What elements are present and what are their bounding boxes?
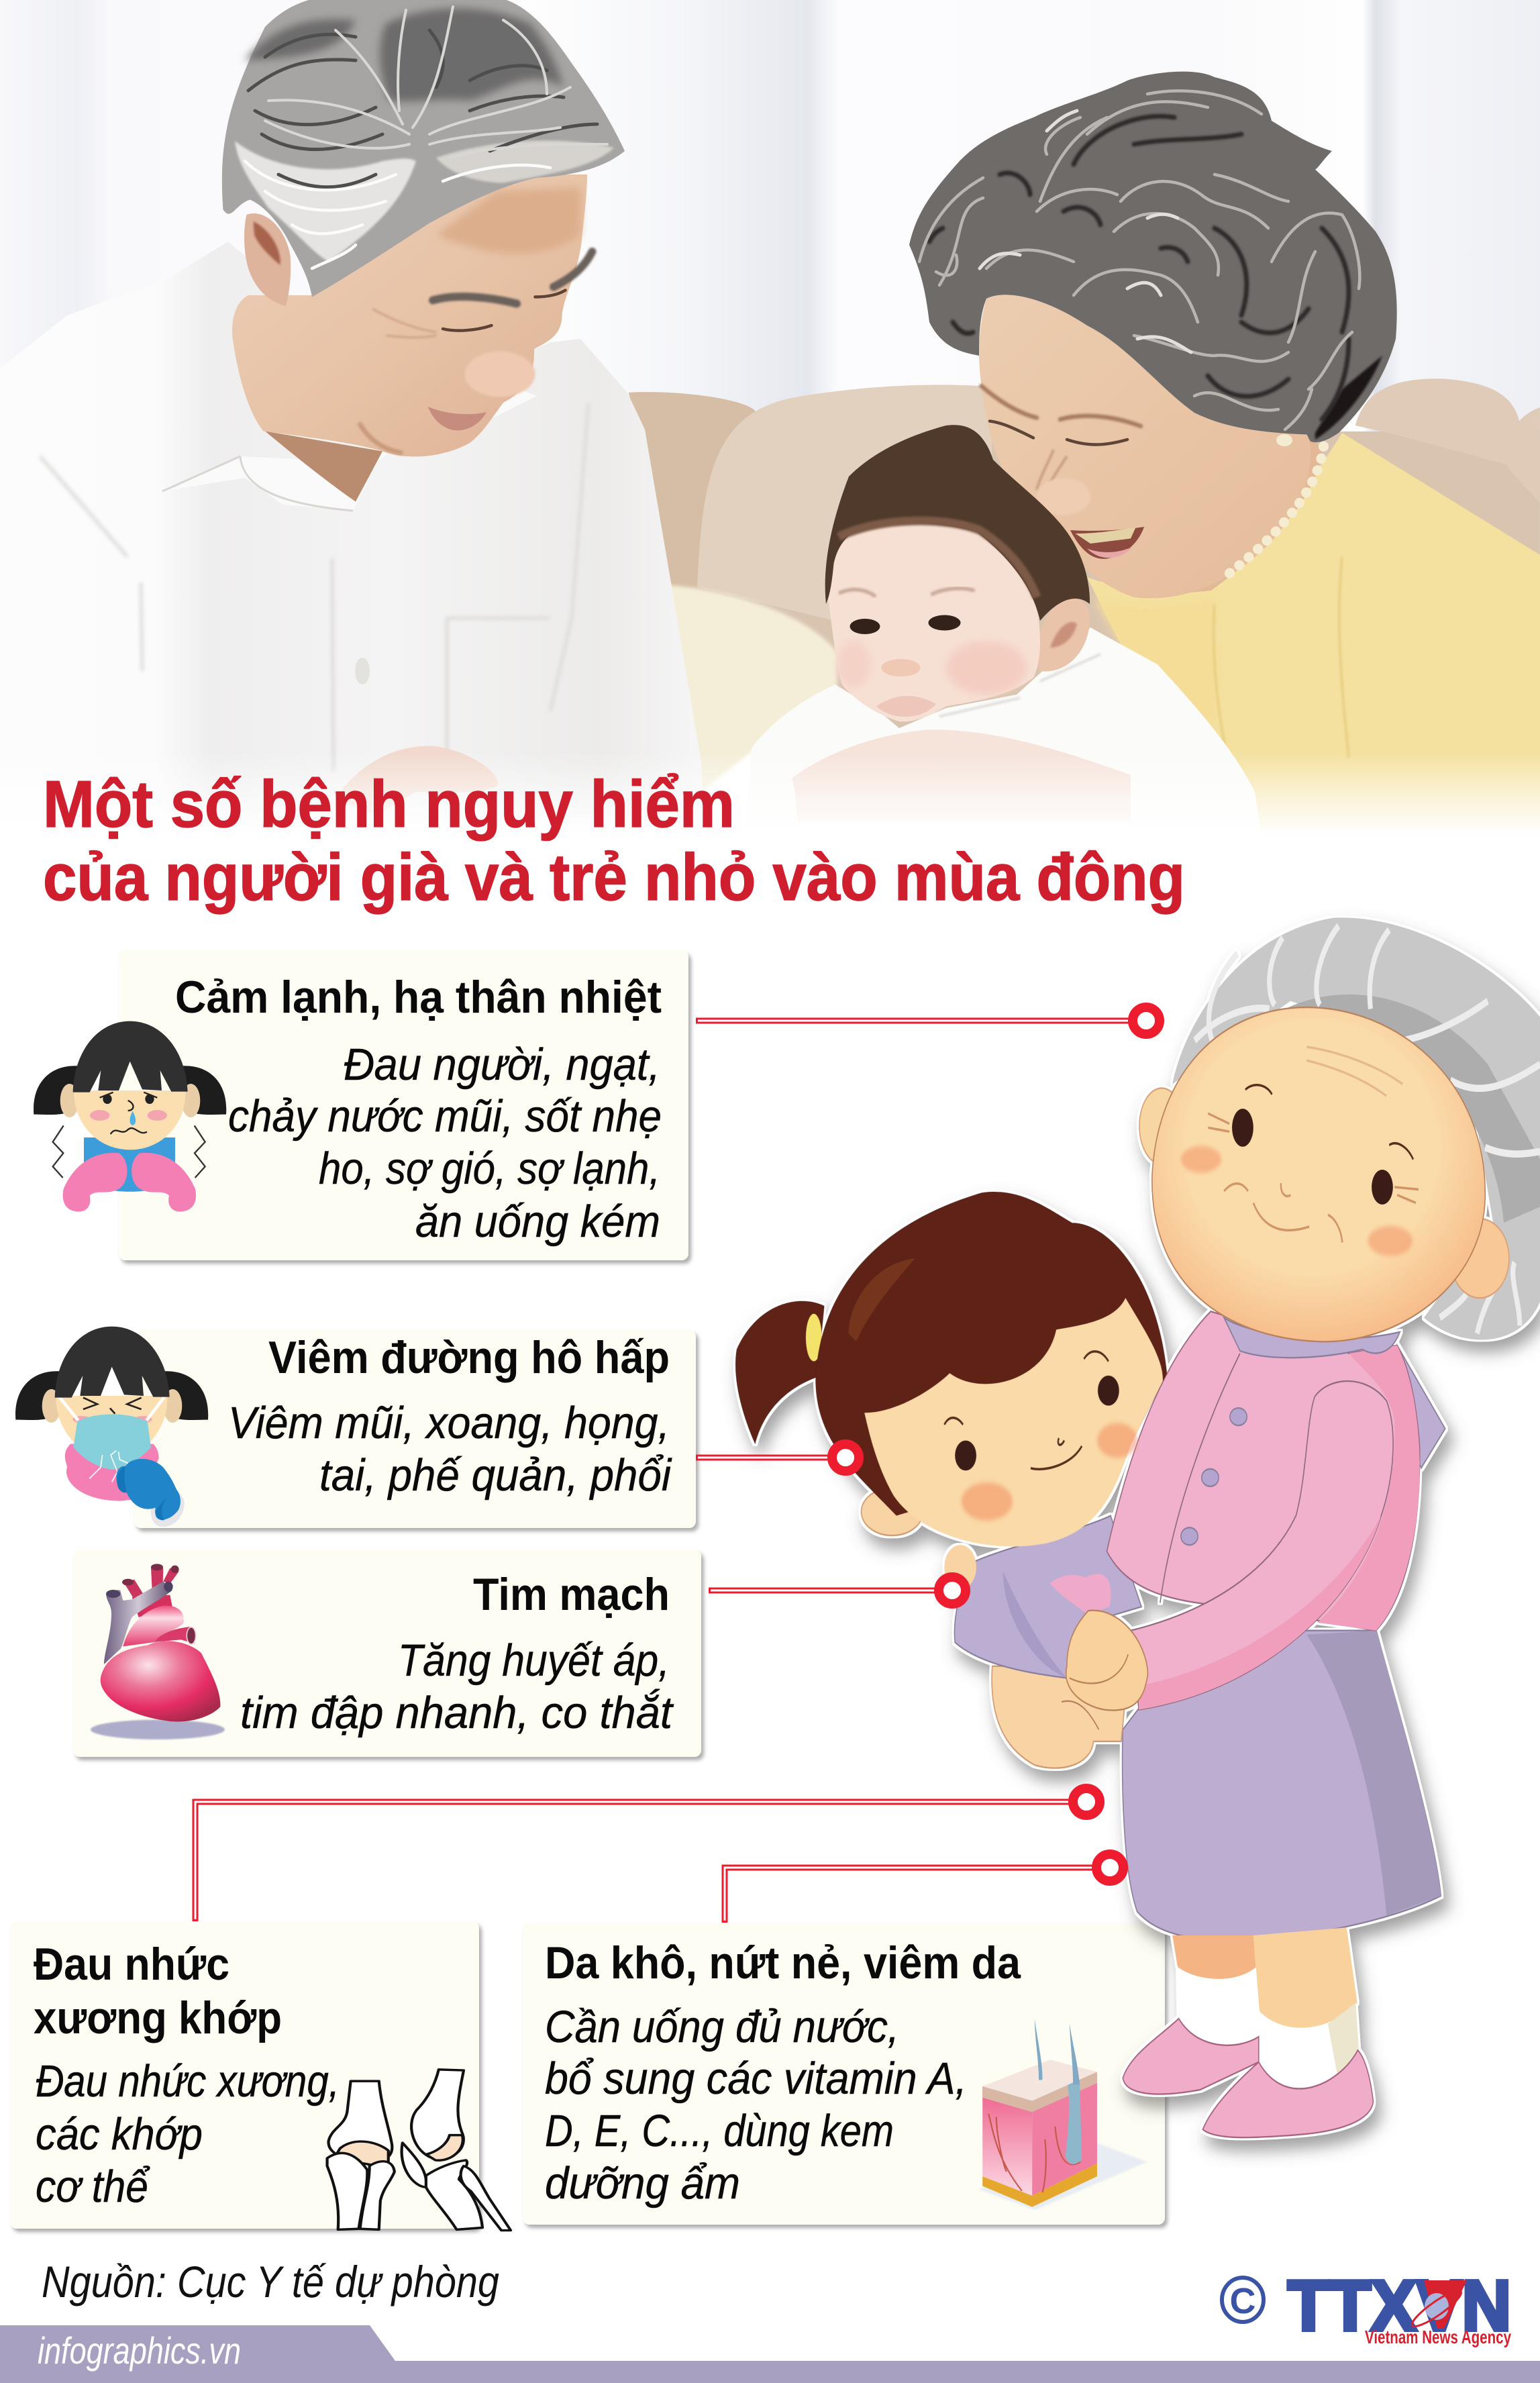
woman: head bbox=[909, 72, 1397, 599]
curtain background bbox=[0, 0, 1540, 510]
grandmother: hair net and bun bbox=[1172, 917, 1540, 1339]
footer band: infographics.vn bbox=[38, 2329, 241, 2372]
panel: dry skin: Da khô, nứt nẻ, viêm da bbox=[545, 1937, 1021, 1988]
panel: dry skin: Cần uống đủ nước, bbox=[545, 2002, 899, 2052]
girl: ear bbox=[861, 1488, 923, 1535]
baby: ear bbox=[1037, 598, 1090, 671]
title: của người già và trẻ nhỏ vào mùa đông bbox=[43, 840, 1185, 914]
panel: joint pain: cơ thể bbox=[36, 2162, 150, 2212]
panel: cold and hypothermia: ăn uống kém bbox=[415, 1197, 660, 1247]
man: grey hair bbox=[222, 0, 625, 297]
title: Một số bệnh nguy hiểm bbox=[43, 767, 735, 841]
panel: respiratory infection bbox=[134, 1330, 696, 1528]
panel: joint pain: Đau nhức bbox=[34, 1939, 229, 1990]
title bbox=[43, 767, 1185, 914]
pillow bbox=[668, 585, 839, 792]
woman: eyes, brows, nose bbox=[981, 386, 1141, 426]
connector: respiratory to girl bbox=[696, 1444, 859, 1471]
man: head bbox=[222, 0, 625, 502]
scarf bbox=[84, 1137, 175, 1192]
source note: Nguồn: Cục Y tế dự phòng bbox=[42, 2257, 499, 2306]
panel: joint pain bbox=[10, 1921, 479, 2229]
grandmother: collar bbox=[1224, 1318, 1400, 1358]
panel: cardiovascular bbox=[73, 1550, 701, 1757]
grandmother: ears bbox=[1139, 1088, 1184, 1164]
panel: dry skin: bổ sung các vitamin A, bbox=[545, 2054, 967, 2104]
man: hand bbox=[336, 746, 498, 815]
panel: cold and hypothermia: Cảm lạnh, hạ thân nhiệt bbox=[175, 972, 662, 1023]
pearl necklace bbox=[1225, 446, 1323, 577]
grandmother: shoes bbox=[1123, 2019, 1259, 2094]
grandmother: buttons bbox=[1181, 1408, 1247, 1545]
woman: hand on baby bbox=[792, 729, 1131, 822]
mittens bbox=[63, 1153, 127, 1211]
sofa bbox=[629, 378, 1540, 731]
girl: face details bbox=[955, 1440, 976, 1470]
woman: face bbox=[979, 295, 1311, 599]
grandmother: arm bbox=[1131, 1381, 1393, 1710]
panel: joint pain: Đau nhức xương, bbox=[36, 2056, 340, 2107]
panel: dry skin: D, E, C..., dùng kem bbox=[545, 2106, 894, 2156]
woman: curly grey hair bbox=[909, 72, 1397, 442]
grandmother: head bbox=[1152, 1007, 1485, 1341]
man: eyebrows and eyes bbox=[433, 252, 592, 303]
connector: heart to girl bbox=[709, 1577, 966, 1604]
girl: face bbox=[864, 1298, 1163, 1547]
icon: girl with mask coughing bbox=[15, 1327, 208, 1527]
woman: neck bbox=[1141, 433, 1322, 597]
grandmother: legs and socks bbox=[1172, 1935, 1259, 1980]
girl: pigtail and hair tie bbox=[735, 1301, 825, 1444]
connector: cold to grandmother's head bbox=[696, 1007, 1160, 1034]
woman: mouth bbox=[1070, 527, 1144, 559]
illustration: grandmother hugging a girl bbox=[735, 917, 1540, 2137]
upper heart bbox=[123, 1606, 184, 1646]
footer band bbox=[0, 2325, 1540, 2383]
panel: cold and hypothermia bbox=[119, 950, 688, 1260]
woman: earring bbox=[1276, 434, 1292, 446]
vessels bbox=[125, 1568, 179, 1599]
mask bbox=[73, 1414, 151, 1470]
man: ear bbox=[244, 213, 291, 306]
icon: knee joints bbox=[327, 2070, 511, 2231]
grandmother: face details bbox=[1208, 1047, 1419, 1243]
baby: clothes and woman's cardigan bbox=[745, 433, 1540, 839]
mitten bbox=[151, 1485, 185, 1527]
panel: cold and hypothermia: chảy nước mũi, sốt nhẹ bbox=[228, 1091, 662, 1142]
panel: cardiovascular: tim đập nhanh, co thắt bbox=[240, 1688, 674, 1738]
icon: heart bbox=[91, 1564, 225, 1739]
man: collar bbox=[162, 376, 537, 511]
logo: TTXVN: TTXVN bbox=[1288, 2266, 1511, 2345]
baby: brows, eyes, nose, mouth bbox=[839, 589, 974, 597]
girl: shirt bbox=[954, 1516, 1141, 1678]
baby: head bbox=[825, 425, 1090, 721]
panel: respiratory infection: tai, phế quản, phổi bbox=[319, 1450, 672, 1501]
panel: cold and hypothermia: Đau người, ngạt, bbox=[344, 1040, 660, 1090]
panel: cardiovascular: Tăng huyết áp, bbox=[398, 1635, 670, 1686]
photo: grandparents with baby bbox=[0, 0, 1540, 852]
lower heart bbox=[101, 1641, 220, 1722]
panel: cardiovascular: Tim mạch bbox=[473, 1569, 670, 1620]
panel: dry skin bbox=[523, 1923, 1165, 2225]
connector: skin to body bbox=[725, 1854, 1123, 1923]
baby: shirt bbox=[745, 627, 1262, 839]
woman: cardigan bbox=[1087, 433, 1540, 839]
grandmother: back and blouse bbox=[1397, 1346, 1445, 1468]
girl: legs bbox=[992, 1666, 1125, 1768]
connector: joints to body bbox=[195, 1788, 1100, 1921]
panel: respiratory infection: Viêm đường hô hấp bbox=[268, 1332, 670, 1383]
panel: cold and hypothermia: ho, sợ gió, sợ lạnh, bbox=[319, 1144, 660, 1194]
icon: shivering girl with runny nose bbox=[34, 1021, 226, 1211]
logo: TTXVN: C bbox=[1229, 2281, 1256, 2321]
man: shirt bbox=[0, 242, 705, 852]
grandmother: skirt bbox=[1123, 1631, 1441, 1940]
panel: joint pain: xương khớp bbox=[34, 1992, 282, 2043]
baby: hair bbox=[825, 425, 1090, 621]
scarf bbox=[65, 1444, 159, 1501]
girl: hair bbox=[815, 1192, 1167, 1516]
panel: joint pain: các khớp bbox=[36, 2109, 203, 2160]
panel: respiratory infection: Viêm mũi, xoang, họng, bbox=[228, 1398, 670, 1448]
icon: skin cross-section bbox=[978, 2019, 1147, 2210]
man: mouth bbox=[428, 407, 486, 430]
baby: face bbox=[827, 520, 1040, 721]
photo bottom fade bbox=[0, 752, 1540, 835]
hands bbox=[1066, 1611, 1148, 1711]
panel: dry skin: dưỡng ẩm bbox=[545, 2158, 740, 2209]
